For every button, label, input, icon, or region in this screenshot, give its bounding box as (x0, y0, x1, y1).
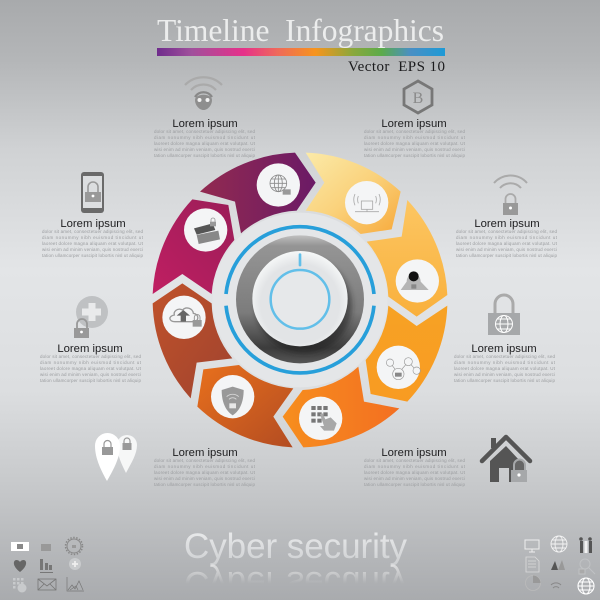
callout: top left: dolor sit amet, consectetuer adipiscing elit, sed (154, 129, 255, 134)
icon: plus circle (69, 558, 81, 570)
callout: top left: laoreet dolore magna aliquam erat volutpat. Ut (154, 141, 256, 146)
callout: bottom left (95, 433, 256, 487)
icon: wifi shield (211, 375, 254, 418)
callout: left lower: Lorem ipsum (57, 343, 123, 355)
callout: left lower: tation ullamcorper suscipit lobortis nisl ut aliquip (40, 378, 141, 383)
callout: bottom left: diam nonummy nibh euismod tincidunt ut (154, 464, 256, 469)
callout: right lower: diam nonummy nibh euismod tincidunt ut (454, 360, 556, 365)
segment 4 orange (366, 306, 447, 402)
icon: bar chart (40, 559, 53, 573)
callout: bottom left: laoreet dolore magna aliquam erat volutpat. Ut (154, 470, 256, 475)
segment 5 deep orange (283, 367, 399, 447)
callout: right upper: laoreet dolore magna aliquam erat volutpat. Ut (456, 241, 558, 246)
callout: left lower: dolor sit amet, consectetuer adipiscing elit, sed (40, 354, 141, 359)
icon: mountains (551, 560, 565, 570)
icon: document (526, 557, 539, 572)
callout: right lower: laoreet dolore magna aliquam erat volutpat. Ut (454, 366, 556, 371)
icon: wifi lock (494, 176, 527, 215)
callout: top right: wisi enim ad minim veniam, quis nostrud exerci (364, 147, 465, 152)
callout: right lower: tation ullamcorper suscipit lobortis nisl ut aliquip (454, 378, 555, 383)
icon: envelope (38, 579, 56, 590)
callout: left upper: wisi enim ad minim veniam, quis nostrud exerci (42, 247, 143, 252)
icon: globe lock (257, 163, 300, 207)
callout: right lower: wisi enim ad minim veniam, quis nostrud exerci (454, 372, 555, 377)
icon: network (377, 346, 420, 389)
icon grid: bottom right (525, 536, 595, 594)
segment 2 pale yellow (306, 153, 401, 234)
icon: heart (14, 560, 26, 572)
callout: left upper: dolor sit amet, consectetuer adipiscing elit, sed (42, 229, 143, 234)
callout: bottom left: wisi enim ad minim veniam, quis nostrud exerci (154, 476, 255, 481)
icon: plus lock (74, 296, 108, 338)
callout: top left: tation ullamcorper suscipit lobortis nisl ut aliquip (154, 153, 255, 158)
callout: top right (364, 81, 466, 158)
icon: globe (551, 536, 567, 552)
callout: bottom right: wisi enim ad minim veniam, quis nostrud exerci (364, 476, 465, 481)
central disc backing (213, 213, 387, 387)
callout: bottom right: laoreet dolore magna aliquam erat volutpat. Ut (364, 470, 466, 475)
callout: bottom right: diam nonummy nibh euismod tincidunt ut (364, 464, 466, 469)
icon: keypad hand (299, 397, 342, 440)
callout: left upper: diam nonummy nibh euismod tincidunt ut (42, 235, 144, 240)
icon: hooded hacker (396, 259, 439, 303)
callout: top left: Lorem ipsum (172, 118, 238, 130)
icon: people (579, 537, 592, 553)
callout: right lower: dolor sit amet, consectetuer adipiscing elit, sed (454, 354, 555, 359)
segment 6 burnt orange (197, 365, 293, 447)
icon: credit cards (184, 208, 227, 252)
circular diagram (153, 153, 447, 447)
callout: left upper: laoreet dolore magna aliquam erat volutpat. Ut (42, 241, 144, 246)
callout: right upper: dolor sit amet, consectetuer adipiscing elit, sed (456, 229, 557, 234)
title: Timeline Infographics (157, 13, 444, 48)
callout: right upper: diam nonummy nibh euismod tincidunt ut (456, 235, 558, 240)
power ring arcs (226, 227, 374, 373)
callout: bottom left: tation ullamcorper suscipit lobortis nisl ut aliquip (154, 482, 255, 487)
icon: wifi skull (185, 77, 222, 110)
callout: bottom left: Lorem ipsum (172, 447, 238, 459)
icon: white globe (578, 578, 594, 594)
subtitle: Vector EPS 10 (348, 59, 445, 75)
icon: monitor (525, 540, 539, 552)
callout: left lower: wisi enim ad minim veniam, quis nostrud exerci (40, 372, 141, 377)
icon: cloud upload (162, 296, 206, 339)
callout: bottom right: dolor sit amet, consectetuer adipiscing elit, sed (364, 458, 465, 463)
segment 8 magenta (153, 199, 234, 294)
callout: bottom right: Lorem ipsum (381, 447, 447, 459)
callout: right lower: Lorem ipsum (471, 343, 537, 355)
callout: bottom left: dolor sit amet, consectetuer adipiscing elit, sed (154, 458, 255, 463)
segment 7 brown red (153, 283, 232, 398)
callout: top left: diam nonummy nibh euismod tincidunt ut (154, 135, 256, 140)
icon: small card (41, 544, 51, 551)
icon: magnifier lock (579, 559, 595, 574)
callout: right upper: Lorem ipsum (474, 218, 540, 230)
icon: keypad (13, 578, 26, 592)
callout: top right: diam nonummy nibh euismod tincidunt ut (364, 135, 466, 140)
callout: top right: Lorem ipsum (381, 118, 447, 130)
icon: monitor lock (11, 542, 29, 551)
callout: left lower: diam nonummy nibh euismod tincidunt ut (40, 360, 142, 365)
callout: left lower (40, 296, 142, 383)
icon: gear (66, 538, 82, 554)
callout: top right: laoreet dolore magna aliquam erat volutpat. Ut (364, 141, 466, 146)
callout: bottom right (364, 437, 530, 487)
icon: house lock (482, 437, 530, 482)
icon: hexagon coin: B (413, 90, 423, 107)
callout: bottom right: tation ullamcorper suscipit lobortis nisl ut aliquip (364, 482, 465, 487)
rainbow bar (157, 48, 445, 56)
icon: phone lock (81, 172, 104, 213)
icon: padlock globe (488, 295, 520, 335)
callout: right upper: wisi enim ad minim veniam, quis nostrud exerci (456, 247, 557, 252)
callout: right upper: tation ullamcorper suscipit lobortis nisl ut aliquip (456, 253, 557, 258)
callout: left upper: Lorem ipsum (60, 218, 126, 230)
icon: map pins (95, 433, 137, 481)
heading: cyber security: Cyber security (184, 527, 408, 566)
icon: pie chart (526, 576, 540, 590)
callout: left lower: laoreet dolore magna aliquam erat volutpat. Ut (40, 366, 142, 371)
segment 1 dark purple (200, 153, 316, 233)
callout: right upper (456, 176, 558, 258)
callout: top right: dolor sit amet, consectetuer adipiscing elit, sed (364, 129, 465, 134)
segment 3 light orange (367, 200, 447, 317)
callout: top right: tation ullamcorper suscipit lobortis nisl ut aliquip (364, 153, 465, 158)
callout: left upper: tation ullamcorper suscipit lobortis nisl ut aliquip (42, 253, 143, 258)
power dial (236, 235, 364, 363)
callout: top left: wisi enim ad minim veniam, quis nostrud exerci (154, 147, 255, 152)
icon: wifi (551, 583, 561, 588)
callout: left upper (42, 172, 144, 258)
icon: wifi monitor (345, 181, 388, 224)
callout: top left (154, 77, 256, 158)
callout: right lower (454, 295, 556, 383)
icon grid: bottom left (11, 538, 84, 592)
icon: line chart (67, 577, 84, 591)
